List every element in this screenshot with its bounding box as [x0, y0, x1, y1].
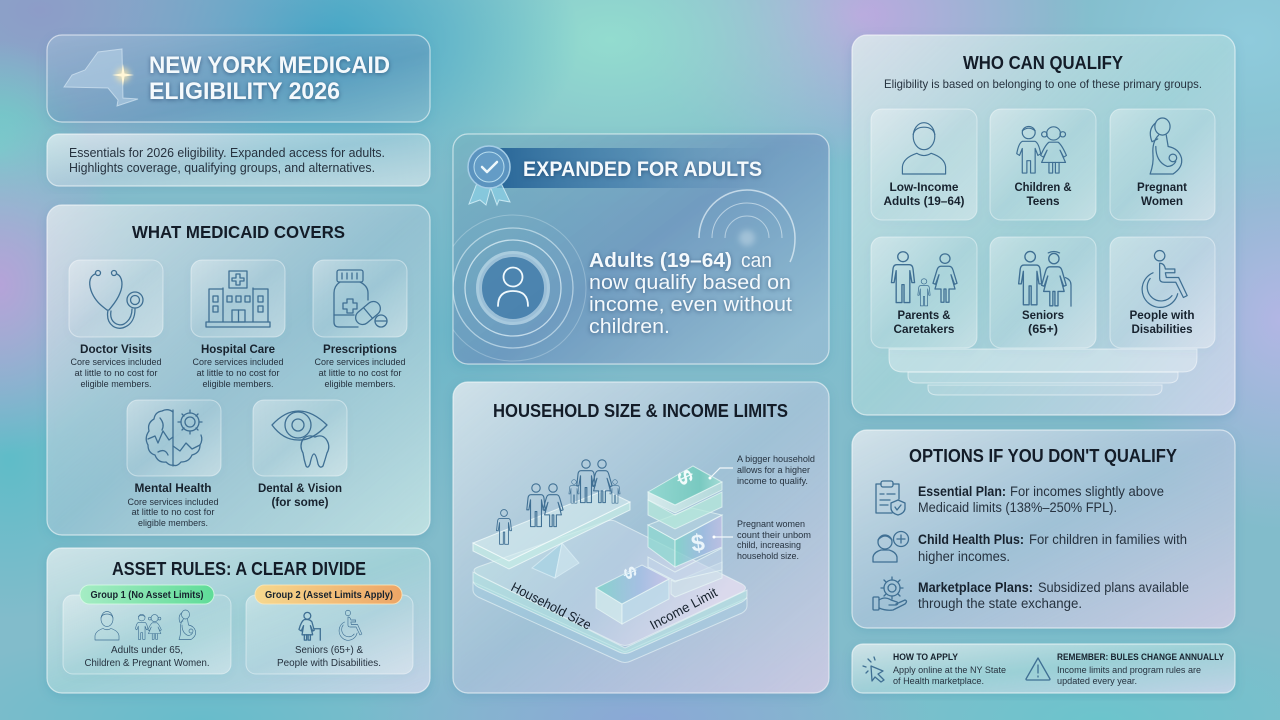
item: prescriptions: Prescriptions — [323, 342, 397, 356]
icon: child with plus bubble — [873, 532, 908, 562]
title text — [149, 52, 390, 105]
option: child health plus: Child Health Plus: — [918, 532, 1024, 547]
icon: brain and gear — [146, 410, 202, 466]
callout: bigger household: A bigger household — [737, 454, 815, 464]
tile: seniors: (65+) — [1028, 322, 1058, 336]
body text: Adults (19–64) — [589, 249, 732, 272]
reminder — [1026, 652, 1224, 686]
reminder: updated every year. — [1057, 676, 1137, 686]
title panel — [47, 35, 430, 122]
item: doctor visits: eligible members. — [80, 379, 152, 389]
item: dental and vision — [253, 400, 347, 509]
isometric diagram — [473, 460, 747, 662]
title text: NEW YORK MEDICAID — [149, 52, 390, 79]
label: income limit axis: Income Limit — [647, 585, 720, 633]
banner: EXPANDED FOR ADULTS — [523, 158, 762, 181]
seesaw fulcrum — [532, 543, 579, 578]
how to apply — [863, 652, 1006, 686]
footer panel — [852, 644, 1235, 693]
seesaw plank — [473, 490, 630, 569]
tile: low-income adults: Adults (19–64) — [884, 194, 964, 208]
icon: hand with gear — [873, 577, 906, 610]
option: marketplace plans: Marketplace Plans: — [918, 580, 1033, 595]
label: household size axis: Household Size — [509, 579, 594, 633]
tile: seniors — [990, 237, 1096, 348]
group 1 card: Adults under 65, — [111, 644, 183, 656]
icon: wheelchair — [1142, 250, 1187, 307]
decorative signal rings — [699, 190, 795, 262]
group 1 card — [63, 585, 231, 674]
callout: bigger household — [708, 454, 815, 486]
item: dental and vision: Dental & Vision — [258, 481, 342, 495]
option: child health plus: For children in families with — [1029, 532, 1187, 547]
group 1 card: Children & Pregnant Women. — [84, 657, 210, 669]
icon: rosette badge — [468, 146, 510, 205]
icon: seniors — [1019, 251, 1071, 306]
icon: family — [891, 252, 957, 306]
body text: can — [741, 249, 772, 272]
panel: options if you don't qualify — [852, 430, 1235, 628]
icon: person in rings — [440, 215, 586, 361]
tile: parents and caretakers — [871, 237, 977, 348]
callout: pregnant women — [712, 519, 811, 561]
option: marketplace plans: through the state exchange. — [918, 596, 1082, 611]
callout: bigger household: income to qualify. — [737, 476, 808, 486]
item: doctor visits — [69, 260, 163, 389]
icon: children — [1017, 126, 1066, 173]
item: mental health: Core services included — [128, 497, 219, 507]
reminder: REMEMBER: BULES CHANGE ANNUALLY — [1057, 652, 1224, 662]
panel: asset rules — [47, 548, 430, 693]
icon: adult — [902, 123, 946, 174]
icon: warning triangle — [1026, 658, 1050, 680]
tile: pregnant women: Pregnant — [1137, 180, 1187, 194]
pill: group 2: Group 2 (Asset Limits Apply) — [265, 590, 393, 601]
body text: income, even without — [589, 293, 792, 316]
intro panel: Highlights coverage, qualifying groups, and alternatives. — [69, 161, 375, 175]
item: mental health: eligible members. — [138, 518, 208, 528]
how to apply: of Health marketplace. — [893, 676, 984, 686]
heading: WHO CAN QUALIFY — [963, 53, 1123, 73]
callout: bigger household: allows for a higher — [737, 465, 810, 475]
title text: ELIGIBILITY 2026 — [149, 78, 340, 105]
item: doctor visits: at little to no cost for — [74, 368, 158, 378]
subheading: Eligibility is based on belonging to one of these primary groups. — [884, 77, 1202, 91]
tile: children and teens: Children & — [1014, 180, 1072, 194]
stacked base platform — [473, 520, 747, 662]
group 2 card: People with Disabilities. — [277, 657, 381, 669]
income stack — [596, 466, 722, 624]
tile: pregnant women: Women — [1141, 194, 1183, 208]
callout: pregnant women: household size. — [737, 551, 799, 561]
pill: group 1 — [80, 585, 214, 604]
icon: stethoscope — [90, 270, 143, 328]
item: hospital care: eligible members. — [202, 379, 274, 389]
panel: what Medicaid covers — [47, 205, 430, 535]
tile: low-income adults — [871, 109, 977, 220]
callout: pregnant women: Pregnant women — [737, 519, 805, 529]
item: hospital care: at little to no cost for — [196, 368, 280, 378]
option: child health plus: higher incomes. — [918, 549, 1010, 564]
pill: group 1: Group 1 (No Asset Limits) — [90, 590, 204, 601]
tile: children and teens: Teens — [1026, 194, 1060, 208]
option: marketplace plans — [873, 577, 1189, 611]
tile: low-income adults: Low-Income — [890, 180, 959, 194]
icon: senior — [299, 612, 320, 640]
panel: expanded for adults — [440, 134, 829, 364]
tile: people with disabilities: People with — [1130, 308, 1194, 322]
icon: wheelchair — [339, 610, 362, 640]
how to apply: HOW TO APPLY — [893, 652, 958, 662]
icon: pregnant woman — [1150, 118, 1182, 174]
heading: OPTIONS IF YOU DON'T QUALIFY — [909, 446, 1177, 466]
panel: household size and income limits — [453, 382, 829, 693]
option: child health plus — [873, 532, 1187, 564]
tile: pregnant women — [1110, 109, 1215, 220]
item: prescriptions: eligible members. — [324, 379, 396, 389]
icon: New York state map — [64, 49, 138, 106]
heading: ASSET RULES: A CLEAR DIVIDE — [112, 559, 366, 579]
stacked glass layers — [889, 349, 1197, 395]
item: hospital care — [191, 260, 285, 389]
icon: pill bottle — [334, 270, 387, 327]
icon: clipboard with shield — [876, 481, 905, 515]
tile: parents and caretakers: Parents & — [898, 308, 951, 322]
callout: pregnant women: count their unbom — [737, 530, 811, 540]
option: marketplace plans: Subsidized plans available — [1038, 580, 1189, 595]
dollar signs on bills: $ — [672, 466, 698, 489]
item: hospital care: Hospital Care — [201, 342, 275, 356]
icon: pregnant woman — [179, 610, 196, 640]
intro panel — [47, 134, 430, 186]
option: essential plan — [876, 481, 1164, 515]
group 2 card — [246, 585, 413, 674]
icon: hospital — [206, 271, 270, 327]
how to apply: Apply online at the NY State — [893, 665, 1006, 675]
icon: children — [135, 614, 161, 639]
icon: cursor click — [863, 657, 884, 682]
tile: children and teens — [990, 109, 1096, 220]
banner — [497, 148, 782, 188]
item: dental and vision: (for some) — [272, 495, 329, 509]
icon: eye and tooth — [272, 411, 329, 467]
option: essential plan: For incomes slightly above — [1010, 484, 1164, 499]
tile: seniors: Seniors — [1022, 308, 1064, 322]
option: essential plan: Essential Plan: — [918, 484, 1006, 499]
item: mental health: at little to no cost for — [132, 507, 215, 517]
tile: people with disabilities — [1110, 237, 1215, 348]
item: mental health: Mental Health — [134, 481, 212, 495]
reminder: Income limits and program rules are — [1057, 665, 1201, 675]
pill: group 2 — [255, 585, 402, 604]
people on seesaw — [497, 460, 620, 544]
icon: adult — [95, 612, 119, 640]
heading: WHAT MEDICAID COVERS — [132, 222, 345, 242]
body text: children. — [589, 315, 670, 338]
item: prescriptions — [313, 260, 407, 389]
item: prescriptions: at little to no cost for — [318, 368, 402, 378]
item: mental health — [127, 400, 221, 528]
item: doctor visits: Core services included — [70, 357, 162, 367]
dollar signs on bills: $ — [619, 564, 640, 583]
tile: people with disabilities: Disabilities — [1132, 322, 1193, 336]
item: prescriptions: Core services included — [314, 357, 406, 367]
callout: pregnant women: child, increasing — [737, 540, 801, 550]
panel: who can qualify — [852, 35, 1235, 415]
tile: parents and caretakers: Caretakers — [894, 322, 955, 336]
body text — [589, 249, 792, 338]
dollar signs on bills: $ — [689, 529, 707, 558]
item: doctor visits: Doctor Visits — [80, 342, 152, 356]
dollar signs on bills — [619, 466, 707, 583]
item: hospital care: Core services included — [192, 357, 284, 367]
body text: now qualify based on — [589, 271, 791, 294]
intro panel: Essentials for 2026 eligibility. Expanded access for adults. — [69, 146, 385, 160]
option: essential plan: Medicaid limits (138%–250% FPL). — [918, 500, 1117, 515]
group 2 card: Seniors (65+) & — [295, 644, 363, 656]
heading: HOUSEHOLD SIZE & INCOME LIMITS — [493, 401, 788, 421]
